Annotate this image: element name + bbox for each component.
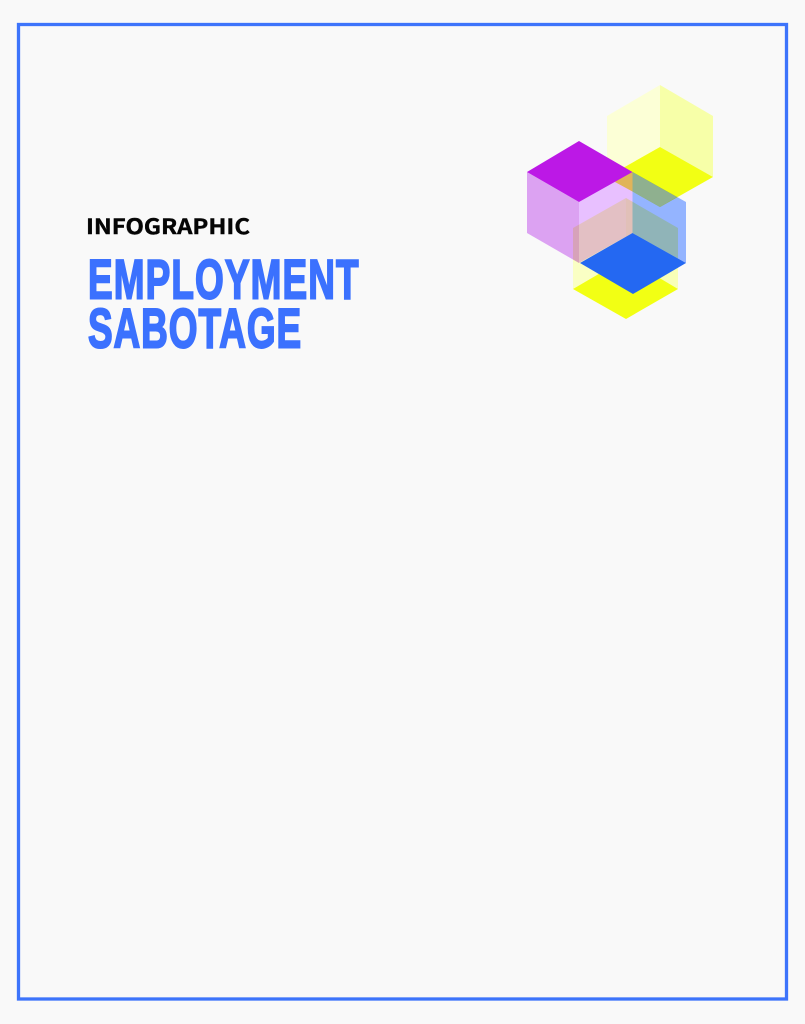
label: infographic: INFOGRAPHIC (86, 211, 250, 241)
cube: top yellow (607, 85, 713, 207)
cube: purple (527, 141, 632, 263)
cube: blue back wall (632, 172, 686, 263)
title: employment sabotage (88, 249, 359, 360)
cube: bottom yellow (573, 198, 678, 319)
title: employment sabotage: SABOTAGE (88, 298, 301, 360)
overlap: yellow floor over blue wall (632, 172, 677, 207)
cube: blue floor (580, 233, 686, 294)
title: employment sabotage: EMPLOYMENT (88, 249, 359, 311)
icon: overlapping isometric cubes (527, 85, 713, 319)
